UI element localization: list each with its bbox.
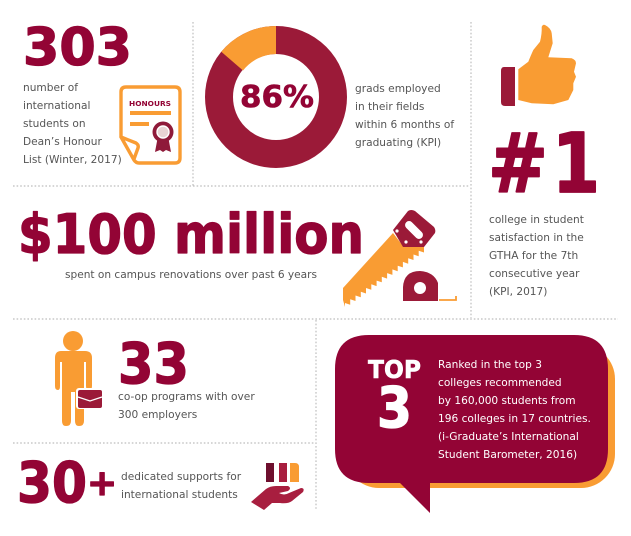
text: satisfaction description: GTHA for the 7th	[489, 250, 578, 262]
icon: hand saw	[343, 210, 435, 307]
text: ranking description: Student Barometer, 2016)	[438, 449, 577, 461]
bubble: orange shadow	[345, 345, 615, 488]
stat: 303: 303	[23, 18, 132, 78]
panel: 30+ supports	[17, 451, 304, 516]
text: supports description: dedicated supports for	[121, 471, 242, 483]
text: co-op description: co-op programs with over	[118, 391, 255, 403]
stat: #1	[488, 117, 600, 212]
text: employment description: graduating (KPI)	[355, 137, 441, 149]
icon: honours certificate: HONOURS	[129, 99, 171, 108]
stat: #1: #	[488, 117, 548, 212]
text: satisfaction description: (KPI, 2017)	[489, 286, 547, 298]
panel: 33 co-op programs	[55, 331, 255, 426]
chart: donut 86 percent	[219, 26, 333, 154]
stat: #1: 1	[552, 117, 600, 212]
text: satisfaction description: consecutive year	[489, 268, 580, 280]
stat: 30+: +	[87, 463, 117, 504]
icon: honours certificate	[121, 87, 180, 163]
text: co-op description: 300 employers	[118, 409, 197, 421]
text: employment description: in their fields	[355, 101, 424, 113]
text: employment description: grads employed	[355, 83, 441, 95]
stat: TOP: TOP	[368, 355, 421, 384]
text: satisfaction description: satisfaction in the	[489, 232, 584, 244]
panel: 86% employed	[219, 26, 454, 154]
text: honour list description: List (Winter, 2017)	[23, 154, 122, 166]
text: honour list description: international	[23, 100, 90, 112]
text: ranking description: (i-Graduate’s International	[438, 431, 579, 443]
panel: 303 honour list	[23, 18, 180, 166]
text: supports description: international students	[121, 489, 238, 501]
panel: number one satisfaction	[488, 25, 600, 298]
text: ranking description: colleges recommended	[438, 377, 562, 389]
text: honour list description: number of	[23, 82, 78, 94]
panel: top 3 speech bubble	[335, 335, 615, 513]
icon: thumbs up	[501, 25, 576, 106]
text: ranking description: 196 colleges in 17 countries.	[438, 413, 591, 425]
text: ranking description: Ranked in the top 3	[438, 359, 542, 371]
icon: hand holding books	[251, 463, 304, 510]
stat: 33: 33	[118, 332, 189, 397]
icon: person with briefcase	[55, 331, 103, 426]
stat: $100 million: $100 million	[18, 203, 364, 266]
stat: 30+: 30	[17, 451, 87, 516]
text: employment description: within 6 months of	[355, 119, 454, 131]
text: ranking description: by 160,000 students from	[438, 395, 576, 407]
stat: 86%: 86%	[240, 80, 314, 115]
panel: 100 million renovations	[18, 203, 456, 307]
text: satisfaction description: college in student	[489, 214, 584, 226]
text: renovations description: spent on campus renovations over past 6 years	[65, 269, 317, 281]
bubble: maroon body	[335, 335, 608, 513]
text: honour list description: Dean’s Honour	[23, 136, 102, 148]
icon: tape measure	[403, 271, 456, 301]
text: honour list description: students on	[23, 118, 86, 130]
stat: 3: 3	[377, 376, 412, 441]
